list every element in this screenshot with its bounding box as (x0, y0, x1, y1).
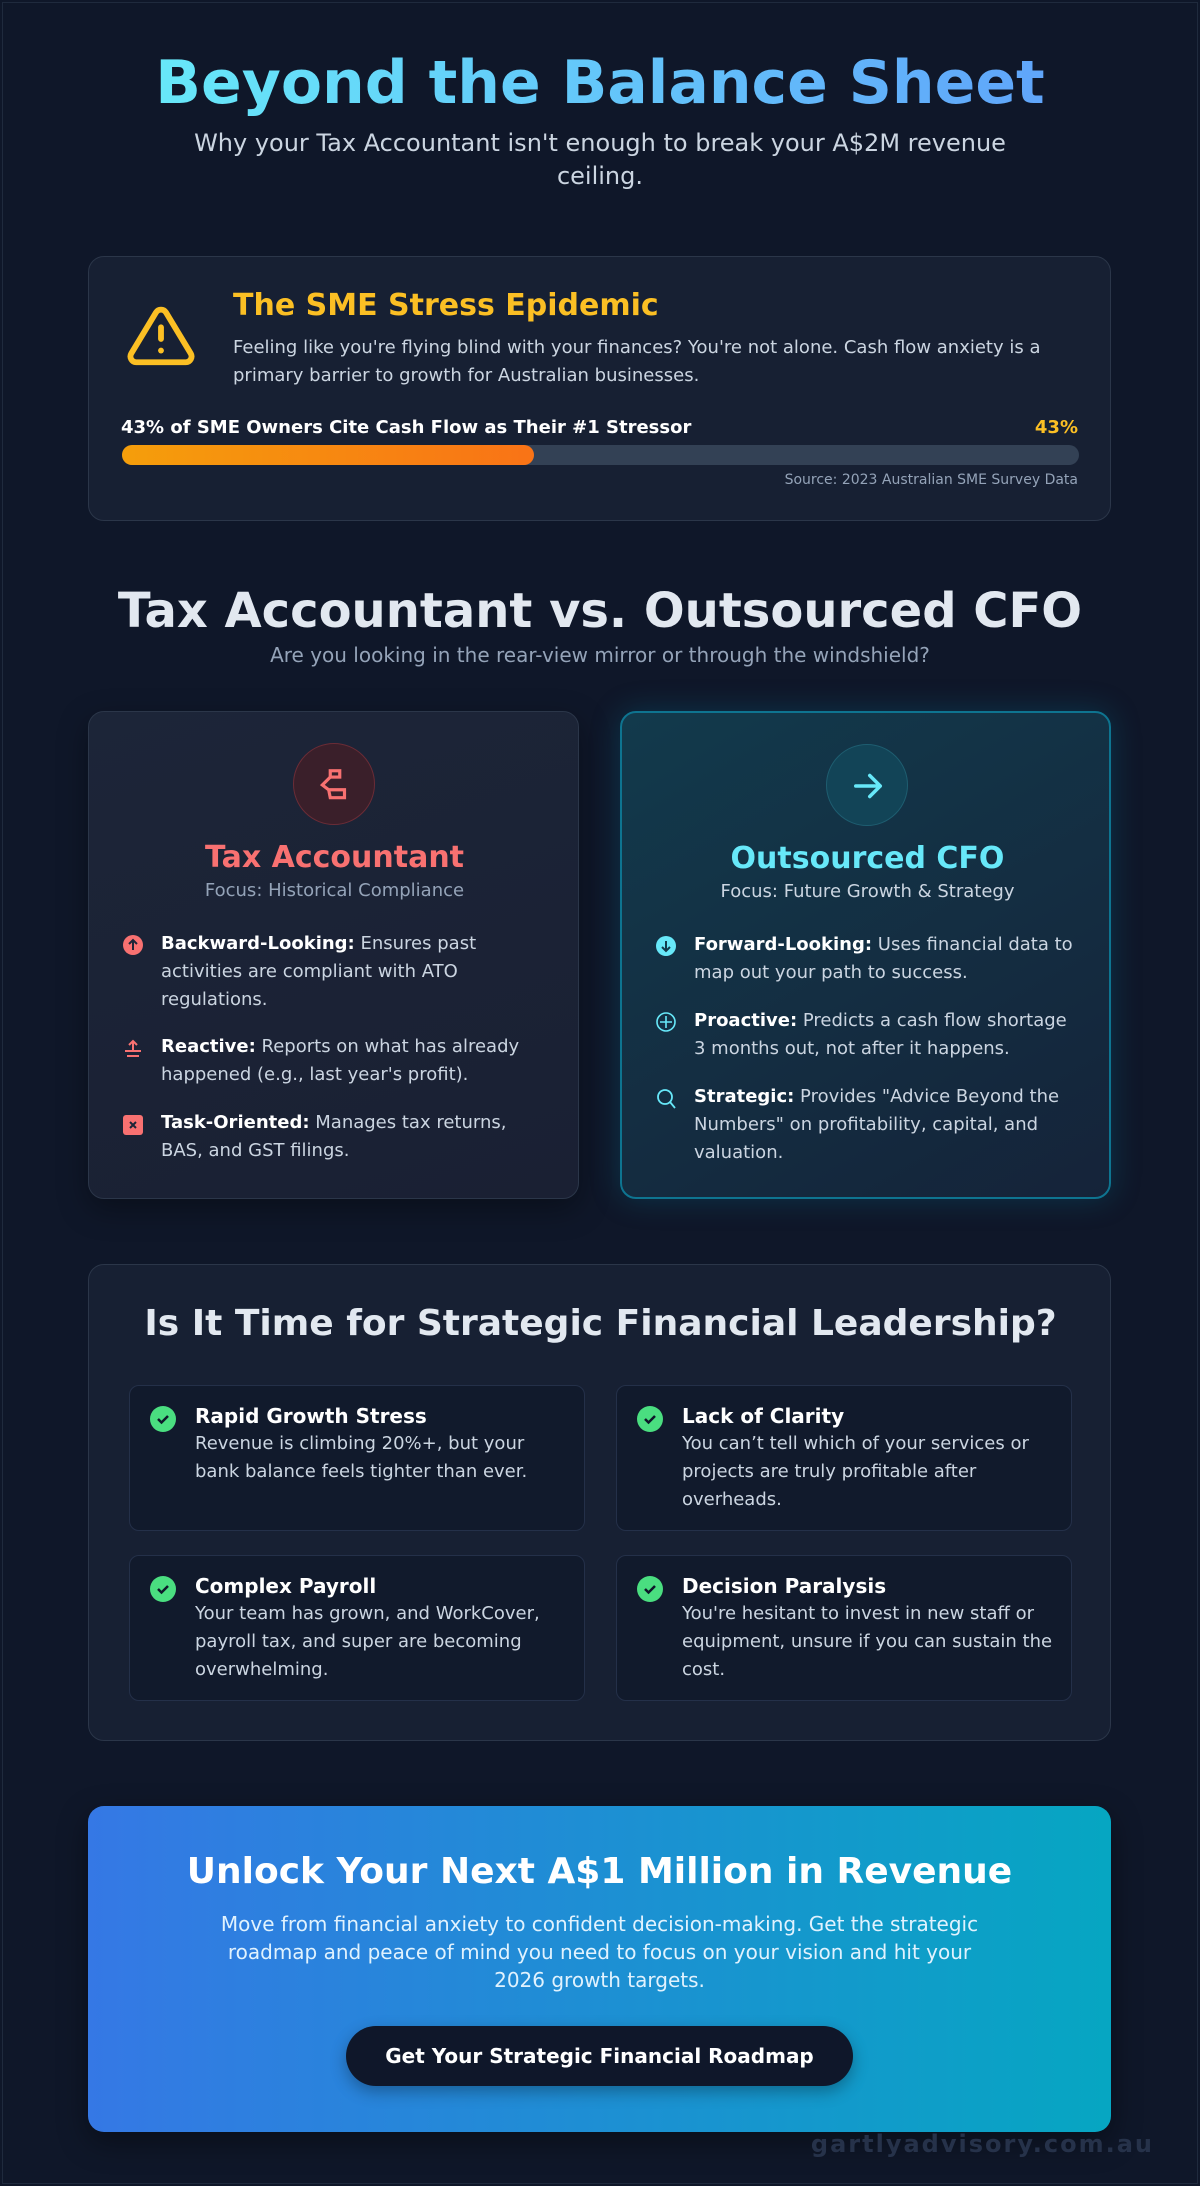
icon: warning (128, 306, 194, 366)
source: Source: 2023 Australian SME Survey Data (785, 472, 1078, 488)
watermark: gartlyadvisory.com.au (811, 2130, 1154, 2158)
text block: Feeling like you're flying blind with your finances? You're not alone. Cash flow anxiety is a primary barrier to growth for Australian businesses. (233, 337, 1040, 386)
item: reactive: Reactive: Reports on what has already happened (e.g., last year's profit). (161, 1036, 519, 1085)
checklist item: decision paralysis: Decision Paralysis (682, 1574, 886, 1598)
panel: SME stress epidemic (88, 256, 1111, 521)
bar value: 43% (1035, 417, 1078, 438)
checklist item: rapid growth (129, 1385, 585, 1531)
icon: up circle (123, 935, 143, 955)
CTA button (346, 2026, 853, 2086)
checklist item: lack of clarity (616, 1385, 1072, 1531)
item: strategic: Strategic: Provides "Advice Beyond the Numbers" on profitability, capital, and valuation. (694, 1086, 1059, 1163)
checklist item: decision paralysis (616, 1555, 1072, 1701)
checklist item: rapid growth: Revenue is climbing 20%+, but your bank balance feels tighter than ever. (195, 1433, 527, 1482)
card title: Tax Accountant (205, 840, 464, 875)
comparison subtitle: Are you looking in the rear-view mirror or through the windshield? (270, 643, 930, 667)
icon: down circle (656, 936, 676, 956)
checklist item: complex payroll: Complex Payroll (195, 1574, 376, 1598)
panel: strategic leadership checklist (88, 1264, 1111, 1741)
focus: Focus: Historical Compliance (205, 880, 464, 901)
checklist item: decision paralysis: You're hesitant to invest in new staff or equipment, unsure if you can sustain the cost. (682, 1603, 1052, 1680)
focus: Focus: Future Growth & Strategy (720, 881, 1014, 902)
checklist item: rapid growth: Rapid Growth Stress (195, 1404, 427, 1428)
CTA button: Get Your Strategic Financial Roadmap (385, 2044, 814, 2068)
panel: outsourced CFO (620, 711, 1111, 1199)
bar label: 43% of SME Owners Cite Cash Flow as Their #1 Stressor (121, 417, 691, 438)
icon: task (123, 1115, 143, 1135)
icon: history (293, 743, 375, 825)
checklist item: lack of clarity: You can’t tell which of your services or projects are truly profitable after overheads. (682, 1433, 1029, 1510)
bar chart (122, 445, 1079, 465)
panel: call to action (88, 1806, 1111, 2132)
CTA text: Move from financial anxiety to confident decision-making. Get the strategic roadmap and peace of mind you need to focus on your vision and hit your 2026 growth targets. (221, 1912, 978, 1992)
title: Beyond the Balance Sheet (155, 48, 1045, 118)
subtitle: Why your Tax Accountant isn't enough to break your A$2M revenue ceiling. (194, 129, 1006, 190)
panel: tax accountant (88, 711, 579, 1199)
icon: arrow (826, 744, 908, 826)
checklist heading: Is It Time for Strategic Financial Leadership? (144, 1303, 1057, 1344)
heading: comparison: Tax Accountant vs. Outsourced CFO (118, 583, 1082, 639)
item: forward looking: Forward-Looking: Uses financial data to map out your path to success. (694, 934, 1073, 983)
heading: The SME Stress Epidemic (233, 288, 659, 323)
item: proactive: Proactive: Predicts a cash flow shortage 3 months out, not after it happens. (694, 1010, 1067, 1059)
item: backward looking: Backward-Looking: Ensures past activities are compliant with ATO regulations. (161, 933, 476, 1010)
item: task oriented: Task-Oriented: Manages tax returns, BAS, and GST filings. (161, 1112, 506, 1161)
icon: search (657, 1089, 676, 1109)
card title: Outsourced CFO (731, 841, 1004, 876)
icon: reactive (125, 1040, 141, 1057)
checklist item: complex payroll: Your team has grown, and WorkCover, payroll tax, and super are becoming overwhelming. (195, 1603, 540, 1680)
checklist item: lack of clarity: Lack of Clarity (682, 1404, 844, 1428)
icon: plus circle (656, 1012, 676, 1032)
CTA heading: Unlock Your Next A$1 Million in Revenue (187, 1851, 1012, 1892)
checklist item: complex payroll (129, 1555, 585, 1701)
